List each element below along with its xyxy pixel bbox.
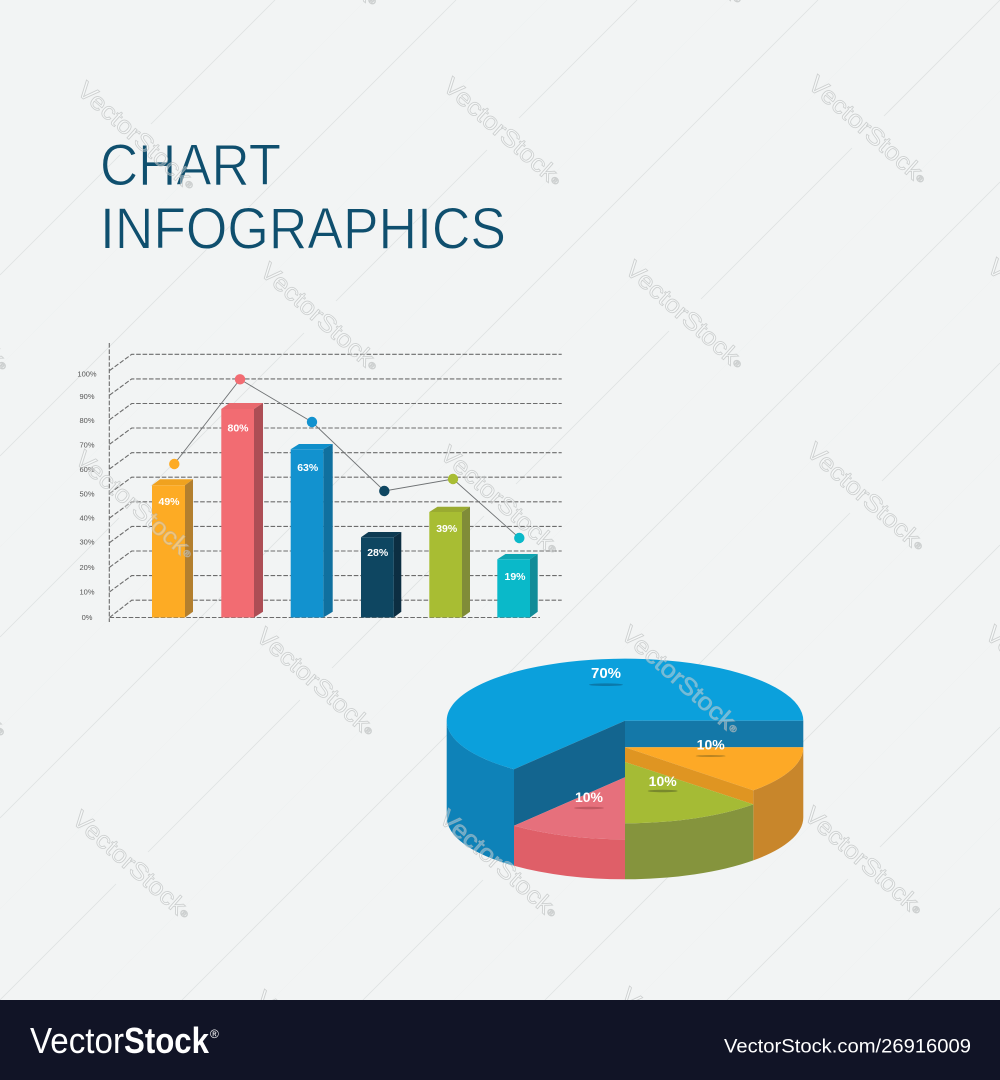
slice: green 10%: 10% xyxy=(649,773,677,789)
watermark tiles: ® xyxy=(178,908,190,920)
y axis labels: 10% xyxy=(79,588,95,596)
bar: 28% xyxy=(361,532,401,618)
chart grid xyxy=(109,343,562,622)
watermark tiles: VectorStock xyxy=(799,802,912,907)
y axis labels: 20% xyxy=(79,563,95,572)
slice: red 10%: 10% xyxy=(575,789,604,805)
y axis labels: 60% xyxy=(79,465,95,474)
watermark tiles: ® xyxy=(910,904,922,916)
watermark tiles: ® xyxy=(545,907,557,919)
bar: 28%: 28% xyxy=(367,547,389,559)
watermark tiles: VectorStock xyxy=(72,77,185,182)
y axis labels: 90% xyxy=(79,392,95,401)
slice: orange 10%: 10% xyxy=(697,736,725,752)
slice: green 10% xyxy=(625,762,753,879)
y axis labels: 50% xyxy=(79,490,95,498)
watermark tiles: VectorStock xyxy=(255,258,368,363)
bar: 49% xyxy=(152,479,193,618)
watermark tiles: ® xyxy=(912,540,924,552)
3D pie chart xyxy=(447,659,803,879)
watermark tiles: VectorStock xyxy=(803,71,916,176)
title: INFOGRAPHICS xyxy=(100,196,506,261)
watermark tiles: ® xyxy=(914,173,926,185)
watermark tiles: VectorStock xyxy=(67,806,180,911)
slice: blue 70% xyxy=(447,659,803,866)
slice: orange 10% xyxy=(625,736,803,860)
bar: 80%: 80% xyxy=(227,423,249,435)
title xyxy=(100,133,506,261)
watermark tiles: VectorStock xyxy=(620,256,733,361)
watermark tiles: ® xyxy=(727,723,739,735)
bar: 49%: 49% xyxy=(158,496,180,508)
bar: 19% xyxy=(497,554,538,618)
footer bar xyxy=(0,1000,1000,1080)
watermark tiles: ® xyxy=(183,179,195,191)
slice: blue 70%: 70% xyxy=(591,665,621,682)
bar chart xyxy=(77,343,562,622)
bar: 63% xyxy=(291,444,333,618)
bar: 80% xyxy=(221,403,263,618)
watermark tiles: VectorStock xyxy=(438,73,551,178)
watermark tiles: VectorStock xyxy=(616,621,729,726)
watermark tiles: ® xyxy=(731,358,743,370)
watermark tiles: ® xyxy=(181,548,193,560)
footer logo xyxy=(30,1020,219,1061)
title: CHART xyxy=(100,133,281,198)
bar: 63%: 63% xyxy=(297,462,319,474)
watermark tiles: ® xyxy=(549,175,561,187)
footer logo: Vector xyxy=(30,1020,124,1061)
bar: 39%: 39% xyxy=(436,523,458,535)
watermark tiles: VectorStock xyxy=(70,446,183,551)
bar: 19%: 19% xyxy=(504,571,526,583)
y axis labels: 80% xyxy=(79,416,95,425)
watermark tiles: ® xyxy=(366,360,378,372)
watermark tiles: VectorStock xyxy=(801,438,914,543)
watermark tiles: ® xyxy=(362,725,374,737)
footer image id: VectorStock.com/26916009 xyxy=(724,1036,971,1058)
trend line with markers xyxy=(169,374,524,543)
y axis labels: 0% xyxy=(82,613,93,622)
footer logo: ® xyxy=(210,1027,219,1041)
y axis labels xyxy=(77,370,97,622)
watermark tiles: ® xyxy=(546,543,558,555)
y axis labels: 100% xyxy=(77,370,97,378)
footer logo: Stock xyxy=(124,1020,210,1061)
y axis labels: 70% xyxy=(79,440,95,450)
watermark tiles: VectorStock xyxy=(435,441,548,546)
watermark tiles: VectorStock xyxy=(434,805,547,910)
y axis labels: 30% xyxy=(79,538,95,546)
watermark tiles: VectorStock xyxy=(251,623,364,728)
slice: red 10% xyxy=(514,777,625,879)
y axis labels: 40% xyxy=(79,514,95,522)
bar: 39% xyxy=(429,507,470,618)
